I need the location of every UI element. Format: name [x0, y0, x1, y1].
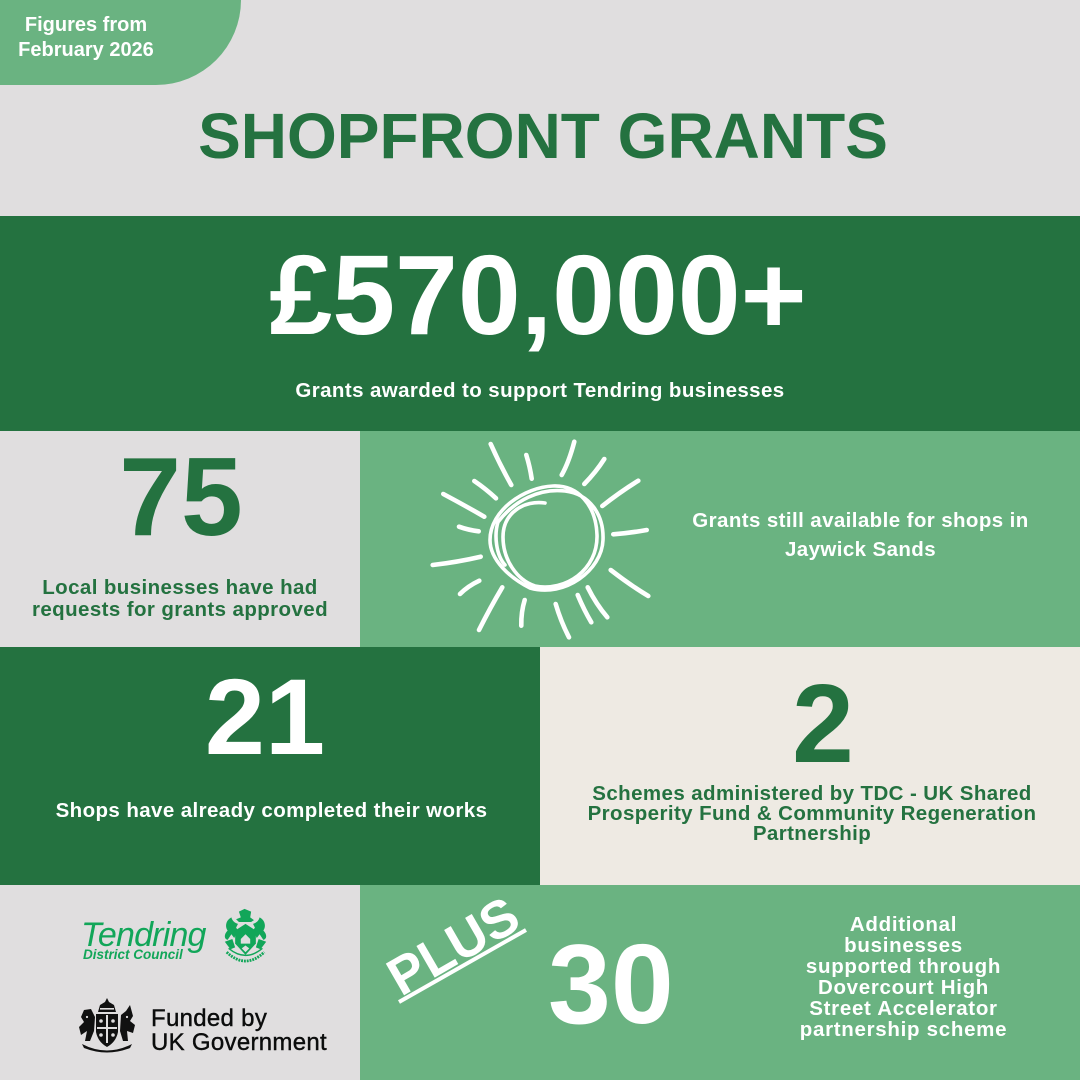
text: figures date — [18, 14, 154, 60]
big number: 2: 2 — [792, 662, 854, 786]
caption: additional: Dovercourt High — [818, 976, 989, 999]
logo: Tendring District Council — [81, 908, 266, 962]
caption: schemes: Partnership — [753, 822, 871, 845]
panel: completed shops — [0, 647, 540, 885]
caption: completed: Shops have already completed their works — [56, 799, 487, 822]
underline — [399, 930, 526, 1002]
caption: additional: businesses — [844, 934, 963, 957]
caption: Jaywick — [692, 509, 1029, 561]
panel: schemes — [540, 647, 1080, 885]
panel: additional businesses — [360, 885, 1080, 1080]
logo text: Tendring: Tendring — [81, 916, 206, 954]
caption: additional: Street Accelerator — [809, 997, 998, 1020]
panel: logos — [0, 885, 360, 1080]
text: figures date: Figures from — [25, 14, 147, 36]
logo: Funded by UK Government — [79, 998, 327, 1056]
caption: approved — [32, 576, 328, 621]
big number: 75: 75 — [119, 435, 243, 559]
caption: schemes: Schemes administered by TDC - UK Shared — [592, 782, 1032, 805]
icon: council crest — [224, 908, 266, 962]
caption: additional: supported through — [806, 955, 1001, 978]
text: figures date: February 2026 — [18, 38, 154, 60]
big number: 30: 30 — [548, 921, 674, 1047]
caption: schemes: Prosperity Fund & Community Regeneration — [588, 802, 1036, 825]
caption: approved: requests for grants approved — [32, 598, 328, 621]
icon: royal arms — [79, 998, 135, 1052]
panel: businesses approved — [0, 431, 360, 647]
panel: total grants — [0, 216, 1080, 431]
logo text: funded by: Funded by — [151, 1005, 267, 1032]
label: plus — [378, 886, 529, 1007]
caption: Jaywick: Grants still available for shops in — [692, 509, 1029, 532]
logo text: funded by: UK Government — [151, 1029, 327, 1056]
caption: additional: partnership scheme — [800, 1018, 1007, 1041]
panel: Jaywick grants — [360, 431, 1080, 647]
caption: additional: Additional — [850, 913, 957, 936]
icon: sun — [430, 439, 651, 640]
big number: 21: 21 — [205, 656, 325, 777]
panel: date badge — [0, 0, 241, 85]
logo text: funded by — [151, 1005, 327, 1056]
caption: approved: Local businesses have had — [42, 576, 318, 599]
title: SHOPFRONT GRANTS — [198, 100, 888, 172]
caption: total: Grants awarded to support Tendring businesses — [295, 379, 785, 402]
caption: Jaywick: Jaywick Sands — [785, 538, 936, 561]
caption: schemes — [588, 782, 1036, 845]
caption: additional — [800, 913, 1007, 1041]
logo text: District Council: District Council — [83, 947, 183, 962]
big number: total: £570,000+ — [269, 232, 807, 358]
text: PLUS: PLUS — [378, 886, 529, 1007]
